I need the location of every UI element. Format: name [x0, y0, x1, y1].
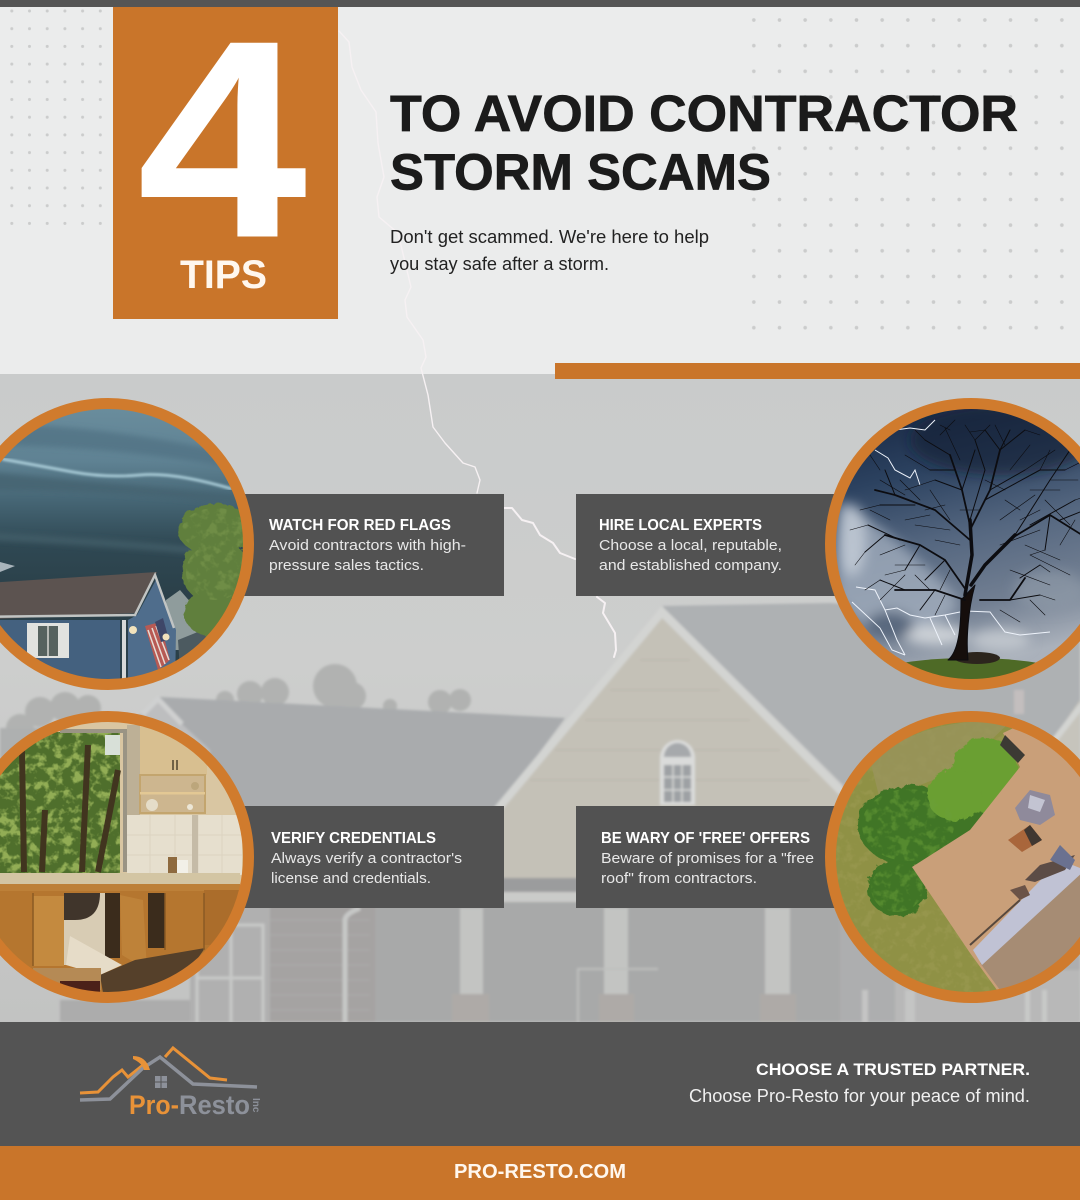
panel: hire local experts: HIRE LOCAL EXPERTS [599, 517, 762, 534]
neighbour house [166, 590, 197, 650]
orange ring [830, 404, 1080, 684]
damage patches [1010, 790, 1075, 900]
logo: Pro-Resto [80, 1048, 261, 1120]
logo icon: grey roof lines [80, 1057, 257, 1100]
panel: hire local experts: Choose a local, reputable, [599, 537, 782, 554]
bushes [858, 785, 986, 916]
dot pattern: right [741, 7, 1075, 340]
window [27, 623, 69, 658]
lower-left window [197, 925, 263, 1022]
panel: verify credentials: VERIFY CREDENTIALS [271, 830, 436, 847]
panel: be wary of free offers [576, 806, 840, 908]
tree highlights [182, 508, 243, 600]
header background [0, 0, 1080, 376]
logo: Pro-Resto: Inc [250, 1098, 261, 1113]
roof slope [912, 725, 1080, 990]
left roof [130, 697, 565, 908]
subtitle: Don't get scammed. We're here to help [390, 227, 709, 247]
lightning bolt [339, 31, 616, 657]
website url: PRO-RESTO.COM [454, 1161, 626, 1183]
photo circle: damaged kitchen [0, 715, 250, 1005]
photo circle: damaged roof from above [830, 715, 1080, 1005]
panel: hire local experts [576, 494, 840, 596]
roof vent box [1008, 825, 1042, 852]
panel: watch for red flags: Avoid contractors with high- [269, 537, 466, 554]
title: TO AVOID CONTRACTOR [390, 85, 1018, 142]
orange ring [0, 716, 248, 998]
house wall [0, 620, 120, 679]
panel: verify credentials: Always verify a contractor's [271, 850, 462, 867]
porch columns [452, 908, 1047, 1022]
panel: be wary of free offers: roof" from contractors. [601, 870, 757, 887]
top strip [0, 0, 1080, 7]
title [390, 85, 1018, 200]
upper cabinet [127, 725, 140, 815]
hazy house [0, 603, 1080, 1022]
footer orange band [0, 1146, 1080, 1200]
bush highlights [862, 789, 954, 912]
orange ring [830, 716, 1080, 998]
open shelf [140, 775, 205, 813]
roof [0, 572, 157, 620]
counter top [0, 873, 240, 875]
tree line [0, 664, 471, 818]
ground [906, 658, 1036, 679]
panel: hire local experts: and established company. [599, 557, 782, 574]
title: STORM SCAMS [390, 144, 771, 200]
panel: be wary of free offers: Beware of promises for a "free [601, 850, 814, 867]
porch fascia [497, 878, 842, 902]
small gable [100, 699, 210, 830]
panel: verify credentials: license and credentials. [271, 870, 431, 887]
lightning strands [852, 420, 1050, 655]
lower right wall [835, 786, 1080, 1022]
clouds [836, 405, 1080, 651]
window frame [60, 731, 125, 872]
logo icon: window [155, 1076, 167, 1088]
logo: Pro-Resto: Resto [179, 1090, 250, 1120]
panel: big 4 tips [113, 0, 338, 319]
photo circle: storm clouds over house [0, 404, 254, 690]
logo wordmark: Pro- [129, 1090, 179, 1120]
subtitle: you stay safe after a storm. [390, 254, 609, 274]
flag [145, 618, 170, 670]
panel: watch for red flags: pressure sales tactics. [269, 557, 424, 574]
panel: verify credentials [240, 806, 504, 908]
panel: be wary of free offers: BE WARY OF 'FREE' OFFERS [601, 830, 810, 847]
tree [178, 502, 243, 636]
background photo: house in storm [0, 374, 1080, 1022]
torn underlayment strip [973, 860, 1080, 965]
porch lights [129, 626, 137, 634]
tree [850, 420, 1080, 660]
panel: watch for red flags [240, 494, 504, 596]
right gable wall [1030, 700, 1080, 800]
closing message: CHOOSE A TRUSTED PARTNER. [756, 1060, 1030, 1079]
lower cabinets [0, 890, 239, 992]
footer dark band [0, 1022, 1080, 1146]
tiled wall [127, 815, 242, 875]
subtitle [390, 227, 709, 274]
main gable siding [500, 618, 840, 880]
photo circle: lightning tree [830, 404, 1080, 714]
closing message: Choose Pro-Resto for your peace of mind. [689, 1086, 1030, 1106]
cloud streak [2, 459, 232, 489]
porch shade [370, 902, 840, 1022]
brick walls [60, 902, 375, 1022]
logo icon: hammer [133, 1056, 150, 1070]
right roof [662, 603, 1080, 792]
window opening with foliage [0, 732, 120, 874]
orange ring [0, 404, 248, 684]
tips label: TIPS [180, 253, 267, 297]
closing message [689, 1060, 1030, 1106]
arched window [660, 740, 695, 805]
panel: watch for red flags: WATCH FOR RED FLAGS [269, 517, 451, 534]
orange header bar [555, 363, 1080, 379]
gable trim [497, 612, 842, 810]
lower darker slope [980, 868, 1080, 990]
dot pattern: left [3, 2, 109, 232]
downpipe [345, 908, 360, 1022]
logo icon: orange roof lines [80, 1048, 227, 1093]
